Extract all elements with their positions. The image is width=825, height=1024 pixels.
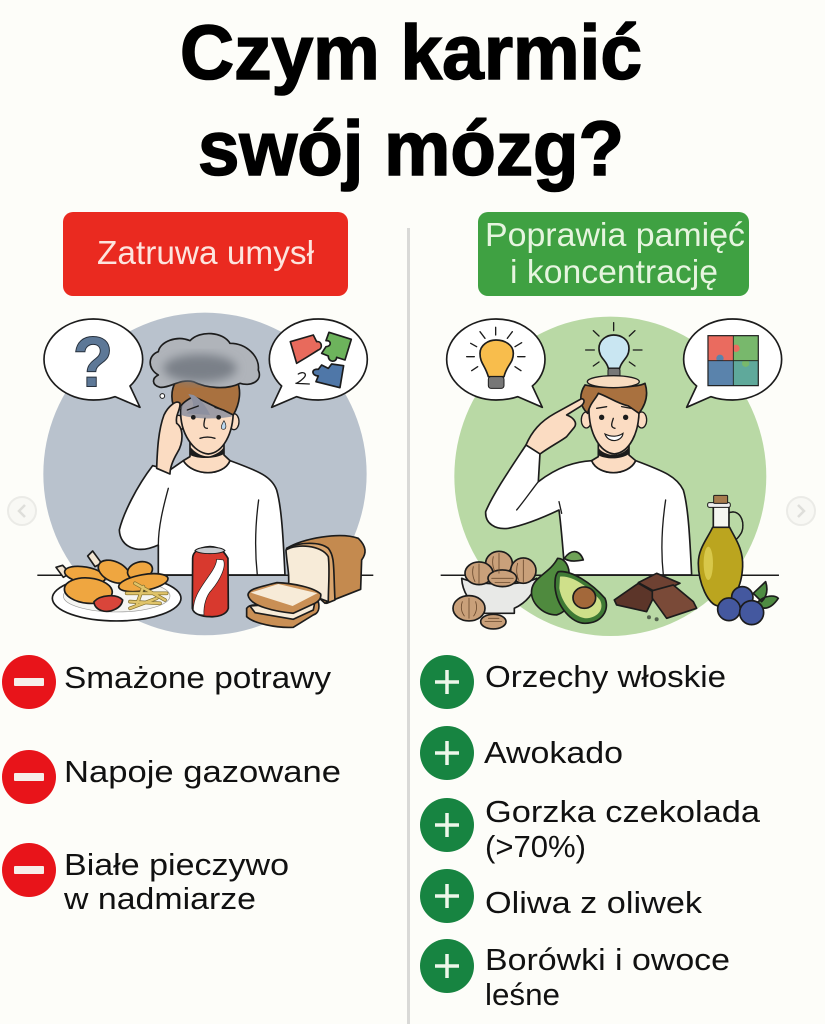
- speech bubble: scattered puzzle: [269, 319, 367, 407]
- item: soda: Napoje gazowane: [64, 754, 341, 789]
- grey circle background: [43, 313, 367, 635]
- hand on temple: [157, 402, 182, 474]
- table line: [441, 573, 779, 578]
- olive oil bottle: [698, 495, 743, 606]
- item: dark chocolate: [420, 794, 761, 864]
- heading: green badge: i koncentrację: [510, 253, 718, 290]
- speech bubble: question mark: [44, 319, 143, 407]
- item: walnuts: [420, 655, 726, 709]
- item: olive oil: Oliwa z oliwek: [485, 885, 703, 920]
- item: berries: [420, 939, 730, 1012]
- bread loaf and slices: [247, 536, 365, 627]
- item: dark chocolate: (>70%): [485, 829, 586, 864]
- speech bubble: question mark: ?: [73, 323, 113, 403]
- pointing hand: [526, 399, 584, 454]
- center divider: [407, 228, 410, 1024]
- item: walnuts: Orzechy włoskie: [485, 659, 726, 694]
- head: [173, 415, 184, 431]
- illustration: tired man with unhealthy food: [37, 313, 373, 635]
- table line: [37, 573, 373, 578]
- title: swój mózg?: [198, 106, 624, 192]
- speech bubble: light bulb: [447, 319, 545, 407]
- item: white bread: [2, 843, 289, 916]
- carousel arrow right: [787, 497, 815, 525]
- heading: red badge: [63, 212, 348, 296]
- soda can: [192, 547, 228, 617]
- item: white bread: w nadmiarze: [63, 881, 256, 916]
- blueberries: [718, 582, 778, 625]
- list: healthy foods: [420, 655, 761, 1012]
- man body: [119, 380, 285, 575]
- item: fried food: Smażone potrawy: [64, 660, 332, 695]
- walnut bowl: [453, 551, 537, 629]
- heading: green badge: Poprawia pamięć: [485, 216, 745, 253]
- carousel arrow left: [8, 497, 36, 525]
- list: harmful foods: [2, 655, 341, 916]
- item: soda: [2, 750, 341, 804]
- head: [581, 412, 591, 428]
- fried food plate: [52, 551, 181, 621]
- avocado: [531, 552, 606, 623]
- item: avocado: [420, 726, 623, 780]
- item: avocado: Awokado: [484, 735, 623, 770]
- item: berries: Borówki i owoce: [485, 942, 730, 977]
- title: Czym karmić: [180, 10, 642, 96]
- illustration: happy man with healthy food: [441, 317, 782, 636]
- item: fried food: [2, 655, 332, 709]
- man body: [486, 376, 692, 575]
- heading: red badge: Zatruwa umysł: [97, 234, 315, 271]
- storm cloud: [150, 334, 259, 398]
- item: dark chocolate: Gorzka czekolada: [485, 794, 761, 829]
- speech bubble: completed puzzle: [684, 319, 782, 407]
- heading: green badge: [478, 212, 749, 296]
- item: olive oil: [420, 869, 703, 923]
- item: berries: leśne: [485, 977, 560, 1012]
- dark chocolate: [614, 573, 697, 621]
- item: white bread: Białe pieczywo: [64, 847, 289, 882]
- green circle background: [454, 317, 766, 636]
- light bulb over head: [586, 323, 642, 382]
- title: [180, 10, 642, 192]
